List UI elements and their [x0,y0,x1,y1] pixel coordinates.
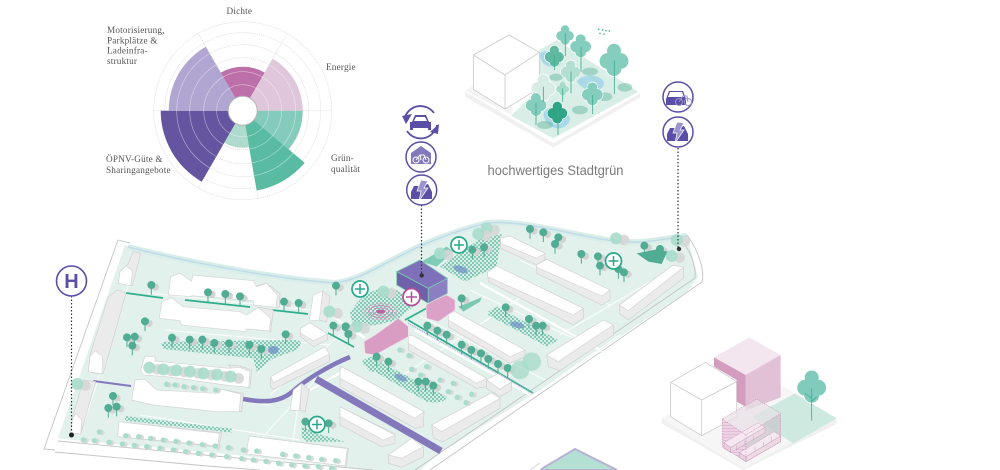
icon: H bus stop: H [64,271,79,293]
green mobility lines [126,293,533,393]
chart label: Motorisierung: Ladeinfra- [107,46,148,56]
pink buildings [426,295,455,322]
icon: e-car charging right [663,117,693,147]
illustration: quartier map [44,222,703,470]
dotted line: right [677,148,679,248]
plus marker: green 1 [352,281,368,297]
green patches [125,340,380,442]
map ground [58,222,698,470]
marker dot: H [69,432,74,438]
dotted line: car sharing [420,205,422,275]
purple building [397,260,447,288]
plus marker: green 2 [451,237,467,253]
illustration: building density cubes [662,337,837,470]
map trees [71,281,370,470]
chart label: Motorisierung: struktur [107,56,137,66]
icon: e-car charging [407,175,437,205]
dotted line: H [70,296,72,434]
plus marker: green 3 [309,416,325,432]
icon: car sharing cycle [402,106,439,138]
polar chart [154,22,332,200]
chart label: Motorisierung: Parkplätze & [107,35,158,45]
chart label: Dichte: Dichte [226,6,252,16]
map outline [44,235,703,470]
white roads [85,260,670,450]
chart label: Grünqualität: Grün- [331,153,354,163]
chart label: Grünqualität: qualität [331,164,360,174]
stream [128,223,687,283]
bottom centre green block [530,449,617,470]
marker dot: right [677,247,681,251]
chart label: ÖPNV: ÖPNV-Güte & [106,154,163,164]
chart label: Energie: Energie [326,62,356,72]
chart label: ÖPNV: Sharingangebote [106,165,171,175]
plus marker: pink [403,288,420,306]
chart label: Motorisierung: Motorisierung, [107,25,165,35]
right slab buildings [340,236,683,467]
icon: car and bike sharing [663,82,693,112]
illustration: hochwertiges Stadtgrün [465,25,640,147]
icon: H bus stop [56,266,86,296]
left row houses [71,252,348,468]
caption: hochwertiges Stadtgrün: hochwertiges Stadtgrün [488,162,624,178]
purple mobility paths [93,357,441,451]
icon: bike garage [406,142,436,172]
marker dot: car sharing [420,273,424,278]
plus marker: green 4 [606,253,622,269]
